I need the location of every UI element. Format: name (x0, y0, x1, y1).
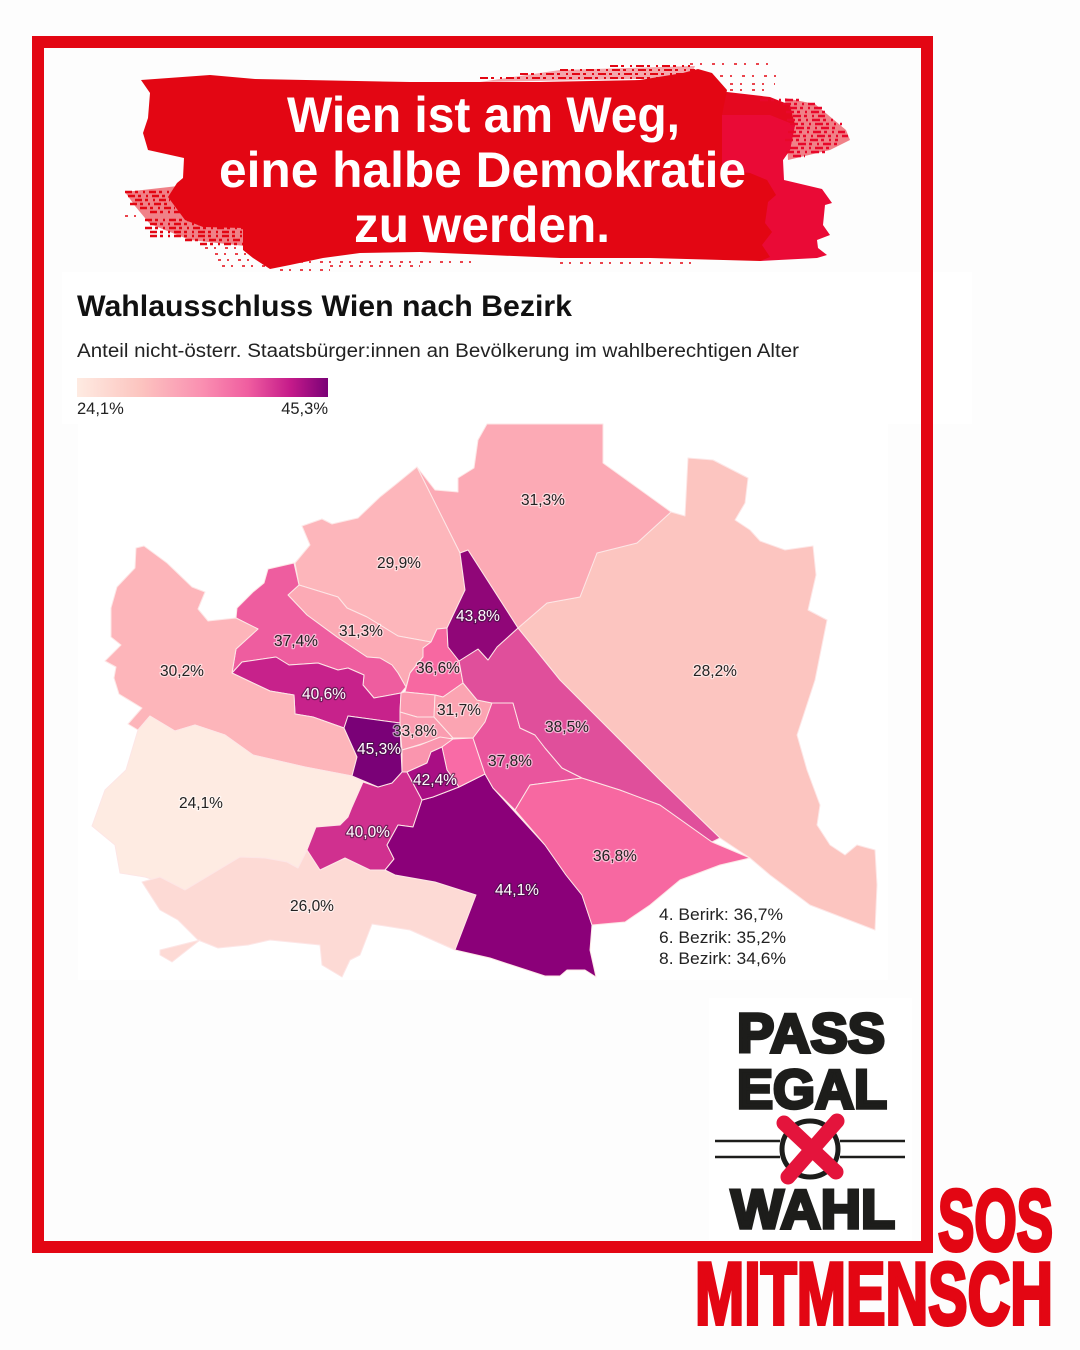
district: Ottakring (232, 657, 401, 728)
logo: Pass Egal Wahl (709, 998, 912, 1240)
colour legend (77, 378, 328, 418)
district value labels (160, 492, 737, 915)
colour legend: 24,1% (77, 400, 124, 418)
district: Floridsdorf (417, 424, 671, 628)
district value labels: 31,3% (521, 492, 565, 509)
district value labels: 36,8% (593, 848, 637, 865)
district value labels: 40,6% (302, 686, 346, 703)
district value labels: 31,3% (339, 623, 383, 640)
district: Waehring (288, 585, 431, 687)
annotation: inner districts not labelled on map: 8. Bezirk: 34,6% (659, 949, 786, 968)
district: Doebling (295, 467, 465, 642)
district: Liesing exclave (160, 940, 200, 962)
chart subtitle: Anteil nicht-österr. Staatsbürger:innen an Bevölkerung im wahlberechtigen Alter (77, 341, 800, 362)
district value labels: 44,1% (495, 882, 539, 899)
district: Mariahilf (402, 737, 453, 772)
district: Simmering (515, 778, 750, 925)
annotation: inner districts not labelled on map: 6. Bezrik: 35,2% (659, 928, 786, 947)
choropleth map of Vienna districts (92, 424, 877, 977)
district: Brigittenau (447, 550, 518, 661)
headline: Wien ist am Weg, (287, 87, 680, 143)
headline: eine halbe Demokratie (219, 142, 746, 198)
annotation: inner districts not labelled on map (659, 905, 786, 968)
district: Josefstadt (400, 692, 435, 717)
district value labels: 29,9% (377, 555, 421, 572)
district: Wieden (442, 738, 485, 787)
district value labels: 37,4% (274, 633, 318, 650)
district value labels: 28,2% (693, 663, 737, 680)
district value labels: 33,8% (393, 723, 437, 740)
district value labels: 37,8% (488, 753, 532, 770)
district: Liesing (142, 850, 476, 977)
map panel background (78, 424, 888, 980)
district: Hernals (232, 563, 406, 698)
district: Leopoldstadt and Brigittenau (459, 628, 720, 842)
headline (219, 87, 746, 253)
district: Favoriten (385, 774, 596, 977)
district: Rudolfsheim-Fuenfhaus (344, 716, 402, 787)
colour legend: 45,3% (281, 400, 328, 418)
district: Innere Stadt (434, 683, 492, 738)
logo: Pass Egal Wahl: PASS (737, 1002, 885, 1064)
brush stroke headline banner (125, 64, 850, 270)
red frame (38, 42, 927, 1247)
district value labels: 36,6% (416, 660, 460, 677)
district: Landstrasse (473, 703, 582, 810)
district value labels: 45,3% (357, 741, 401, 758)
annotation: inner districts not labelled on map: 4. Berirk: 36,7% (659, 905, 783, 924)
district: Meidling (307, 772, 422, 870)
district: Penzing (105, 546, 357, 776)
chart header panel (62, 272, 972, 424)
district: Hietzing (92, 716, 363, 890)
district value labels: 31,7% (437, 702, 481, 719)
logo: Pass Egal Wahl: EGAL (737, 1058, 887, 1120)
district value labels: 30,2% (160, 663, 204, 680)
logo: Pass Egal Wahl: WAHL (731, 1178, 895, 1240)
district: Margareten (407, 747, 459, 800)
district: Alsergrund (405, 628, 463, 697)
headline: zu werden. (354, 197, 610, 253)
district value labels: 24,1% (179, 795, 223, 812)
logo: SOS Mitmensch (695, 1173, 1053, 1343)
district value labels: 42,4% (413, 772, 457, 789)
district value labels: 38,5% (545, 719, 589, 736)
district: Neubau (400, 712, 453, 750)
district value labels: 26,0% (290, 898, 334, 915)
chart title: Wahlausschluss Wien nach Bezirk (77, 290, 572, 323)
district: Donaustadt (518, 458, 877, 930)
district value labels: 43,8% (456, 608, 500, 625)
district value labels: 40,0% (346, 824, 390, 841)
